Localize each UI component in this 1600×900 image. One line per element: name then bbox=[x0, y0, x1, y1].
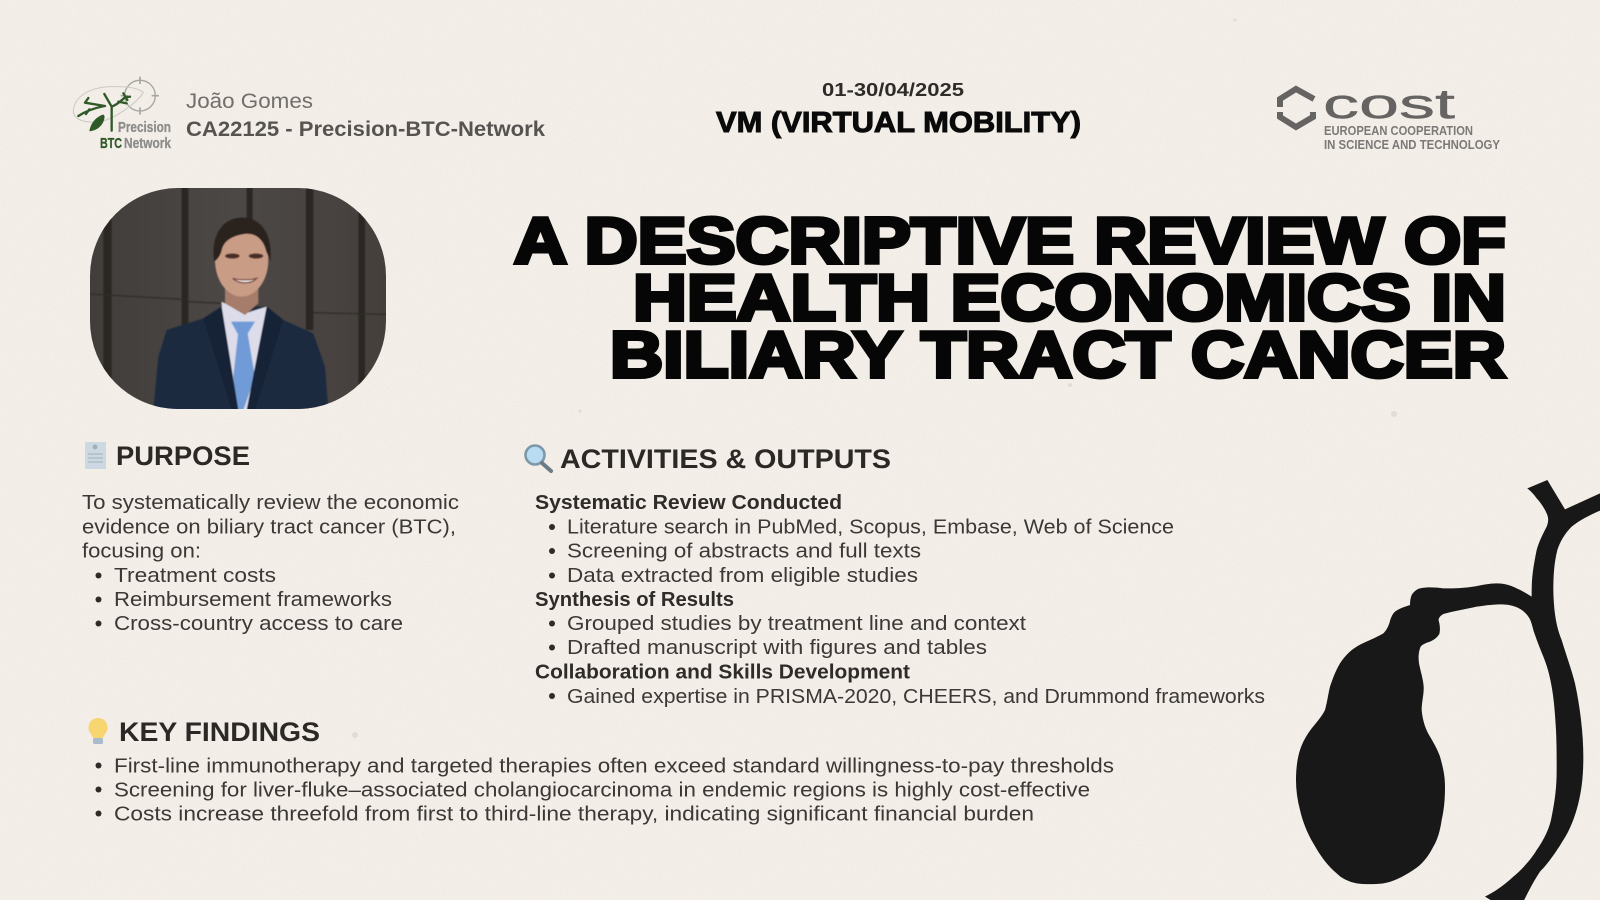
panel: purpose: evidence on biliary tract cancer (BTC), bbox=[82, 516, 456, 538]
logo: Precision BTC Network: Network bbox=[124, 135, 172, 152]
panel: activities and outputs: Systematic Review Conducted bbox=[535, 491, 842, 514]
logo: Precision BTC Network: Precision bbox=[118, 119, 171, 136]
logo: COST: IN SCIENCE AND TECHNOLOGY bbox=[1324, 138, 1501, 152]
author photo bbox=[90, 187, 387, 410]
logo: COST: EUROPEAN COOPERATION bbox=[1324, 124, 1473, 138]
panel: key findings: First-line immunotherapy and targeted therapies often exceed standard willingness-to-pay thresholds bbox=[114, 754, 1114, 778]
mobility type: VM (VIRTUAL MOBILITY) bbox=[716, 107, 1081, 139]
panel: key findings: Screening for liver-fluke–associated cholangiocarcinoma in endemic regions is highly cost-effective bbox=[114, 778, 1090, 802]
panel: key findings bbox=[88, 717, 1114, 826]
panel: purpose bbox=[82, 441, 459, 635]
logo: COST: cost bbox=[1323, 80, 1456, 127]
panel: activities and outputs: Grouped studies by treatment line and context bbox=[567, 612, 1026, 635]
panel: purpose: PURPOSE bbox=[116, 441, 250, 471]
panel: purpose: To systematically review the economic bbox=[82, 491, 459, 514]
illustration: gallbladder and bile ducts bbox=[1296, 480, 1600, 900]
panel: key findings: KEY FINDINGS bbox=[119, 717, 320, 747]
panel: activities and outputs: Synthesis of Results bbox=[535, 588, 734, 611]
panel: key findings: Costs increase threefold from first to third-line therapy, indicating significant financial burden bbox=[114, 802, 1034, 826]
title: HEALTH ECONOMICS IN bbox=[633, 261, 1506, 334]
panel: purpose: Treatment costs bbox=[114, 564, 276, 587]
panel: activities and outputs: Data extracted from eligible studies bbox=[567, 564, 918, 587]
panel: purpose: Cross-country access to care bbox=[114, 612, 403, 635]
author name: João Gomes bbox=[186, 90, 313, 113]
icon: document bbox=[85, 442, 106, 469]
logo: Precision BTC Network: BTC bbox=[100, 135, 122, 152]
logo: Precision BTC Network bbox=[73, 77, 172, 152]
title bbox=[514, 204, 1506, 391]
panel: activities and outputs: Drafted manuscript with figures and tables bbox=[567, 636, 987, 659]
title: BILIARY TRACT CANCER bbox=[610, 318, 1506, 391]
panel: purpose: focusing on: bbox=[82, 540, 201, 562]
panel: activities and outputs: Collaboration and Skills Development bbox=[535, 660, 910, 684]
panel: activities and outputs: Screening of abstracts and full texts bbox=[567, 540, 921, 562]
panel: activities and outputs: Gained expertise in PRISMA-2020, CHEERS, and Drummond frameworks bbox=[567, 685, 1265, 708]
panel: activities and outputs: Literature search in PubMed, Scopus, Embase, Web of Science bbox=[567, 516, 1174, 538]
icon: magnifying glass bbox=[526, 446, 551, 471]
logo: COST bbox=[1280, 80, 1501, 152]
panel: activities and outputs: ACTIVITIES & OUTPUTS bbox=[560, 444, 891, 474]
panel: purpose: Reimbursement frameworks bbox=[114, 588, 392, 611]
action code: CA22125 - Precision-BTC-Network bbox=[186, 118, 545, 141]
panel: activities and outputs bbox=[526, 444, 1265, 708]
date: 01-30/04/2025 bbox=[822, 80, 964, 100]
title: A DESCRIPTIVE REVIEW OF bbox=[514, 204, 1506, 277]
icon: light bulb bbox=[88, 718, 108, 744]
